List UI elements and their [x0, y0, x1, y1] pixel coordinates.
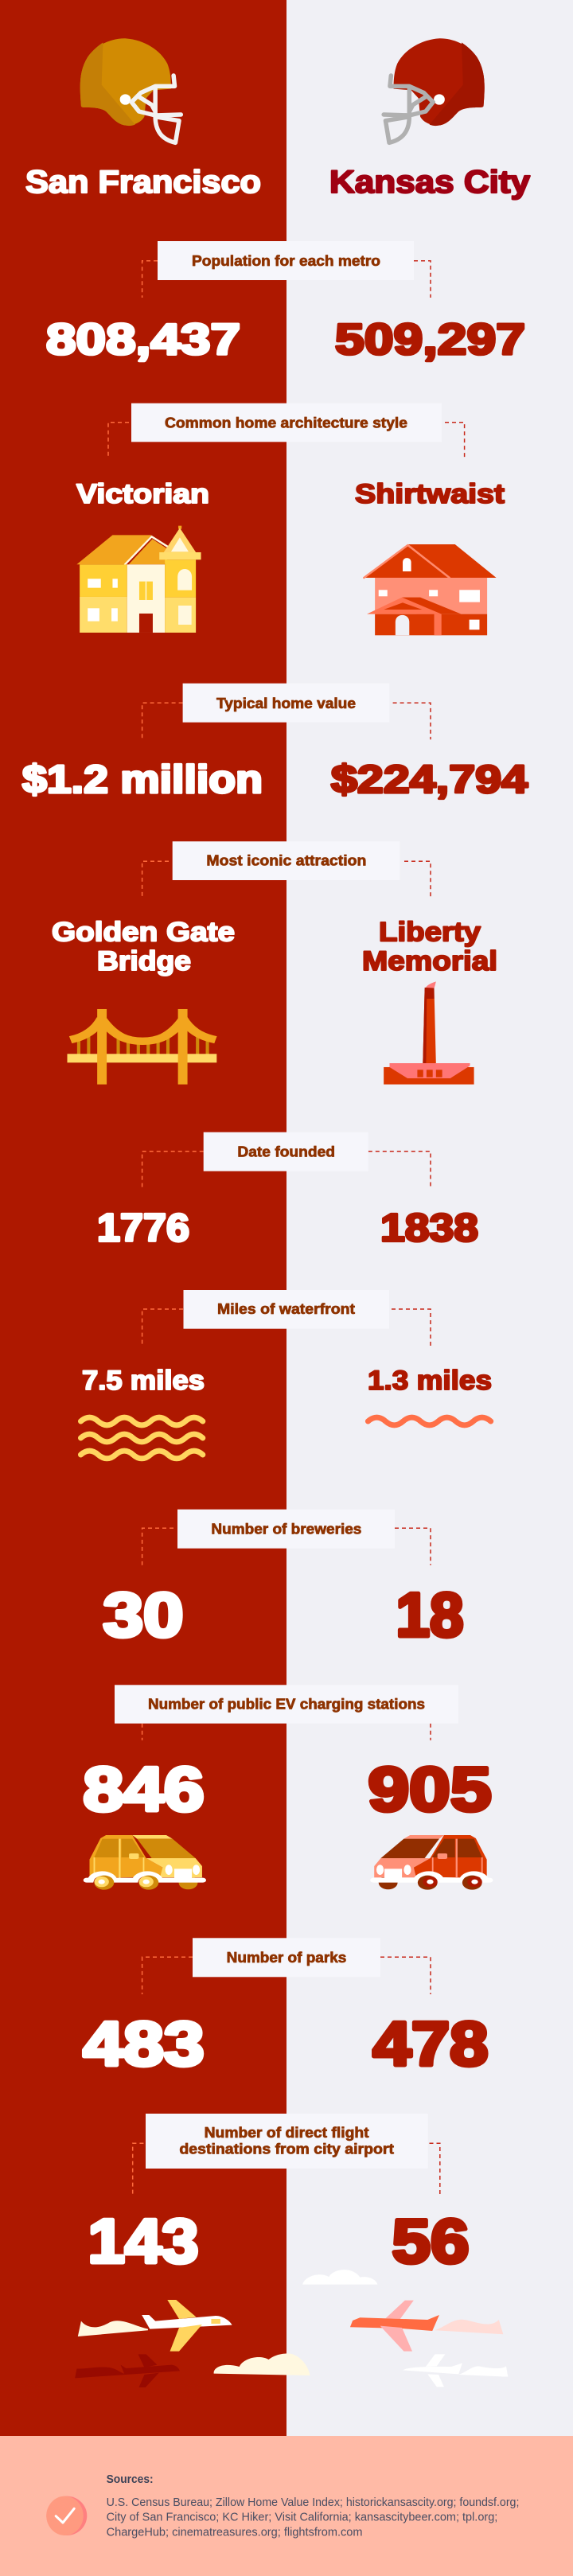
value: Liberty Memorial: Memorial [362, 946, 497, 976]
connector: EV right [430, 1724, 431, 1740]
label: attraction: Most iconic attraction [206, 853, 366, 869]
value: 1.3 miles: 1.3 miles [368, 1366, 492, 1396]
value: 7.5 miles: 7.5 miles [82, 1366, 205, 1396]
panel: San Francisco column [0, 0, 286, 2436]
label: parks: Number of parks [227, 1950, 346, 1966]
text: sources list [107, 2496, 519, 2539]
heading: San Francisco: San Francisco [25, 165, 261, 200]
value: 478: 478 [372, 2009, 489, 2079]
value: San Francisco population: 808,437 [46, 314, 240, 364]
connector: attraction right [404, 861, 431, 898]
icon: Kansas City helmet [384, 38, 485, 142]
label: EV charging [115, 1685, 458, 1724]
icon: Liberty Memorial [384, 981, 474, 1085]
label: waterfront: Miles of waterfront [217, 1301, 355, 1317]
icon: Victorian house [76, 526, 201, 633]
label: parks [193, 1938, 380, 1977]
value: Liberty Memorial: Liberty [379, 917, 481, 947]
label: attraction [173, 841, 400, 880]
icon: San Francisco helmet [80, 38, 181, 142]
connector: parks left [142, 1957, 193, 1994]
value: 846: 846 [83, 1754, 204, 1824]
label: flights: Number of direct flight [205, 2125, 369, 2141]
text: sources list: ChargeHub; cinematreasures.org; flightsfrom.com [107, 2525, 363, 2539]
connector: home value right [393, 703, 431, 739]
label: date founded: Date founded [237, 1144, 335, 1159]
connector: parks right [380, 1957, 431, 1994]
section: home value [22, 684, 528, 801]
icon: dark red plane [75, 2354, 180, 2387]
text: sources list: U.S. Census Bureau; Zillow Home Value Index; historickansascity.org; foundsf.org; [107, 2496, 519, 2509]
icon: yellow car [87, 1835, 203, 1890]
icon: Shirtwaist house [363, 544, 497, 635]
label: home value [183, 684, 389, 723]
heading: Kansas City: Kansas City [329, 165, 531, 200]
icon: white plane [403, 2354, 508, 2387]
connector: flights left [133, 2143, 143, 2194]
connector: breweries left [142, 1528, 173, 1565]
icon: one wave [368, 1417, 491, 1425]
value: Golden Gate Bridge: Bridge [97, 946, 191, 976]
value: Kansas City home value: $224,794 [331, 758, 528, 801]
icon: red car [373, 1835, 489, 1890]
icon: orange plane with trail [350, 2301, 503, 2352]
value: Liberty Memorial [362, 917, 497, 976]
connector: founded left [142, 1152, 204, 1188]
label: flights [146, 2114, 428, 2169]
section: architecture [76, 403, 505, 635]
icon: cream cloud [214, 2353, 310, 2375]
label: architecture [131, 403, 442, 442]
value: 30: 30 [103, 1580, 183, 1650]
connector: waterfront left [142, 1309, 183, 1346]
label: architecture: Common home architecture style [165, 415, 407, 431]
label: EV charging: Number of public EV charging stations [148, 1697, 425, 1713]
section: EV charging [83, 1685, 492, 1890]
value: 56: 56 [392, 2206, 470, 2276]
connector: founded right [368, 1152, 431, 1188]
label: waterfront [183, 1290, 389, 1329]
connector: attraction left [142, 861, 169, 898]
connector: waterfront right [392, 1309, 431, 1346]
value: 1838: 1838 [380, 1206, 478, 1249]
connector: home value left [142, 703, 183, 739]
value: Golden Gate Bridge [52, 917, 235, 976]
label: breweries [177, 1510, 395, 1549]
label: home value: Typical home value [216, 696, 356, 711]
label: population: Population for each metro [192, 253, 380, 269]
connector: architecture left [108, 423, 129, 459]
icon: three waves [80, 1417, 203, 1459]
section: attraction [52, 841, 497, 1085]
value: 483: 483 [83, 2009, 204, 2079]
panel: Kansas City column [286, 0, 573, 2436]
icon: Golden Gate Bridge [67, 1009, 216, 1085]
connector: flights right [430, 2143, 440, 2194]
connector: population right [414, 261, 431, 298]
heading: sources: Sources: [107, 2473, 154, 2486]
icon: check badge [46, 2496, 87, 2535]
label: date founded [204, 1132, 368, 1171]
label: population [158, 241, 414, 280]
icon: white plane with trail [78, 2300, 232, 2352]
value: 905: 905 [368, 1754, 492, 1824]
label: flights: destinations from city airport [179, 2141, 394, 2157]
section: waterfront [80, 1290, 492, 1459]
section: date founded [97, 1132, 478, 1249]
section: population [46, 241, 525, 364]
value: 143: 143 [88, 2206, 199, 2276]
value: Shirtwaist: Shirtwaist [355, 479, 505, 509]
icon: white cloud [302, 2270, 377, 2285]
connector: breweries right [395, 1528, 431, 1565]
connector: architecture right [445, 423, 465, 459]
value: 1776: 1776 [97, 1206, 189, 1249]
value: San Francisco home value: $1.2 million [22, 758, 263, 801]
value: Victorian: Victorian [76, 479, 209, 509]
panel: sources footer [0, 2436, 573, 2576]
section: flights [75, 2114, 508, 2387]
value: Kansas City population: 509,297 [335, 314, 525, 364]
text: sources list: City of San Francisco; KC Hiker; Visit California; kansascitybeer.com; tpl.org; [107, 2510, 497, 2523]
label: breweries: Number of breweries [211, 1522, 361, 1537]
section: parks [83, 1938, 489, 2079]
value: Golden Gate Bridge: Golden Gate [52, 917, 235, 947]
connector: population left [142, 261, 158, 298]
section: breweries [103, 1510, 463, 1650]
value: 18: 18 [396, 1580, 463, 1650]
connector: EV left [142, 1724, 143, 1740]
